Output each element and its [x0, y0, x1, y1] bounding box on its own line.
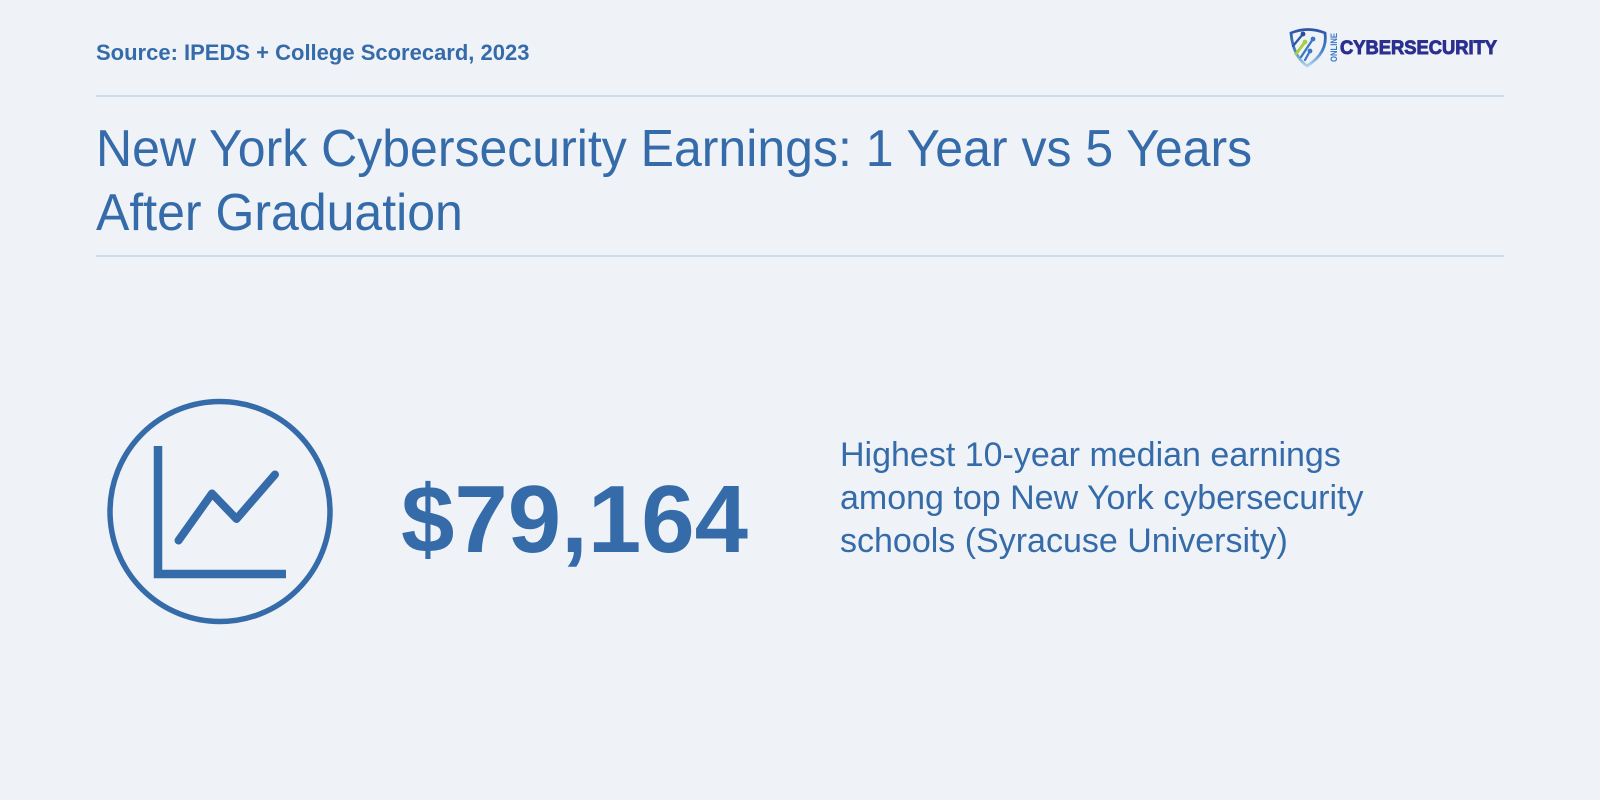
title: After Graduation	[96, 184, 463, 242]
description text	[840, 436, 1364, 560]
description text: schools (Syracuse University)	[840, 522, 1288, 560]
big statistic: $79,164	[401, 466, 748, 573]
description text: among top New York cybersecurity	[840, 479, 1363, 517]
title: New York Cybersecurity Earnings: 1 Year vs 5 Years	[96, 120, 1252, 178]
title	[96, 120, 1252, 242]
logo: Online Cybersecurity	[1290, 28, 1498, 68]
description text: Highest 10-year median earnings	[840, 436, 1341, 474]
logo text: cybersecurity: CYBERSECURITY	[1340, 37, 1497, 59]
logo text: online: ONLINE	[1329, 33, 1340, 62]
icon: line chart in circle	[107, 398, 333, 624]
source line: Source: IPEDS + College Scorecard, 2023	[96, 40, 529, 65]
icon: shield	[1291, 30, 1325, 66]
